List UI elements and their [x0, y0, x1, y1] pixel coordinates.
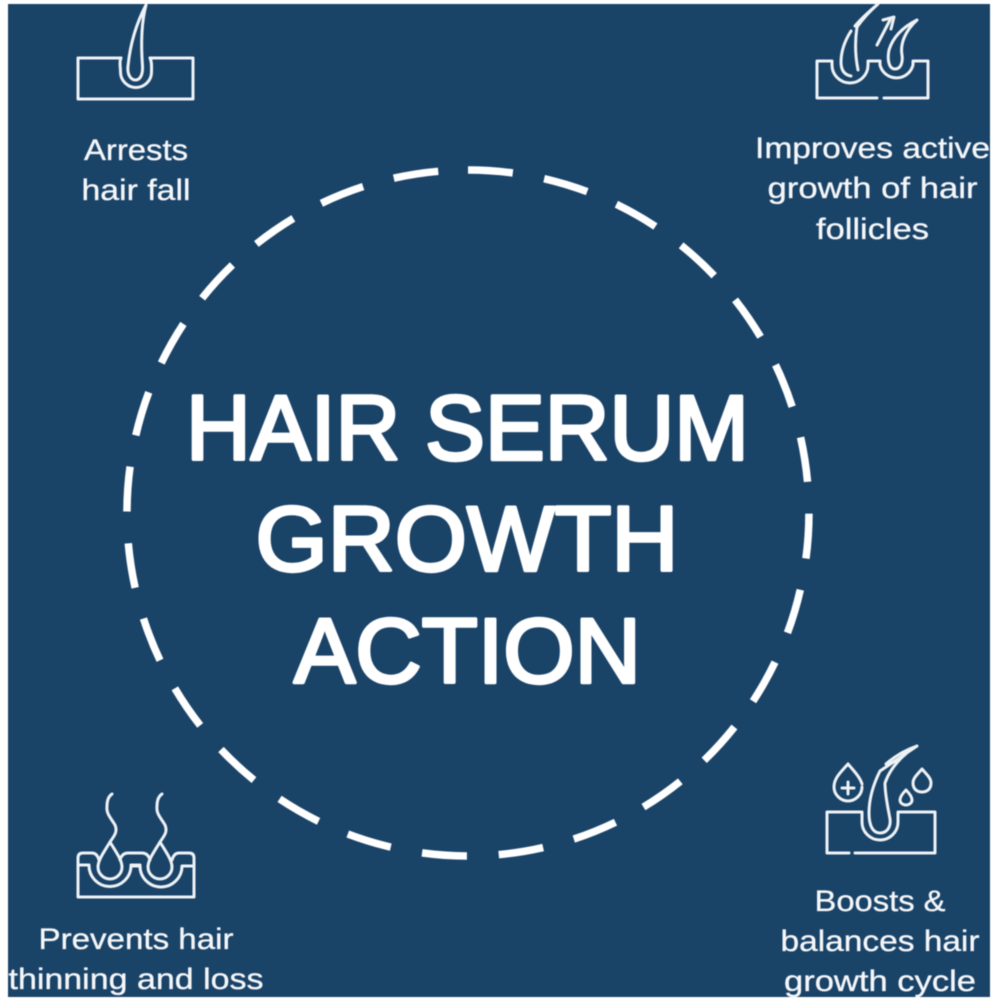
- caption: boosts and balances hair growth cycle: [780, 885, 980, 998]
- title: GROWTH: [256, 488, 678, 590]
- title: [186, 378, 749, 702]
- caption: prevents hair thinning and loss: thinning and loss: [8, 963, 264, 996]
- caption: arrests hair fall: hair fall: [82, 174, 190, 207]
- title: ACTION: [294, 600, 641, 702]
- caption: boosts and balances hair growth cycle: balances hair: [780, 925, 980, 958]
- icon: hair follicles with growth arrow: [817, 4, 928, 98]
- caption: prevents hair thinning and loss: Prevents hair: [38, 923, 234, 956]
- caption: boosts and balances hair growth cycle: Boosts &: [814, 885, 946, 918]
- caption: arrests hair fall: Arrests: [84, 134, 188, 167]
- caption: improves active growth of hair follicles: growth of hair: [768, 172, 978, 205]
- icon: hair with nourishing drops: [827, 746, 935, 853]
- caption: improves active growth of hair follicles: follicles: [816, 213, 929, 246]
- caption: prevents hair thinning and loss: [8, 923, 264, 996]
- icon: hair thinning follicles: [78, 794, 194, 897]
- caption: improves active growth of hair follicles: Improves active: [755, 132, 990, 165]
- caption: improves active growth of hair follicles: [755, 132, 990, 246]
- dashed circle: [127, 170, 809, 856]
- icon: hair follicle, arrests hair fall: [78, 5, 193, 99]
- title: HAIR SERUM: [186, 378, 749, 480]
- caption: arrests hair fall: [82, 134, 190, 207]
- caption: boosts and balances hair growth cycle: growth cycle: [784, 965, 976, 998]
